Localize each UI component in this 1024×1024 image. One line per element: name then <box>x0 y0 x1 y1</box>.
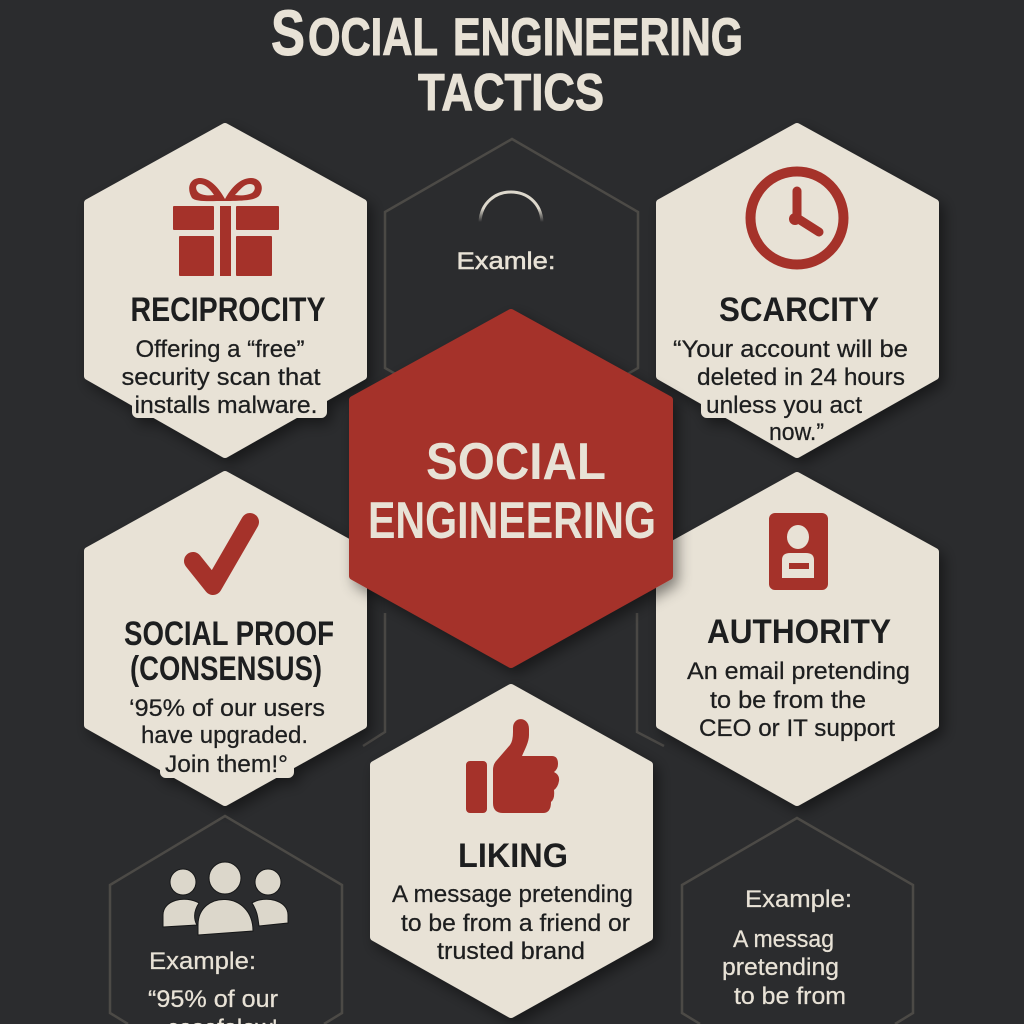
text: Example: <box>149 948 256 975</box>
text: truncated example: Examle: <box>456 248 556 275</box>
heading: AUTHORITY <box>707 613 891 651</box>
heading: SCARCITY <box>719 291 879 329</box>
text: unless you act <box>706 392 862 419</box>
text: to be from the <box>710 687 866 714</box>
text: A message pretending <box>392 881 633 908</box>
heading <box>124 615 334 688</box>
text <box>129 695 325 778</box>
heading: central label: ENGINEERING <box>368 492 656 550</box>
icon: clock <box>750 172 844 264</box>
icon: gift <box>173 178 279 276</box>
text: An email pretending <box>687 658 910 685</box>
icon: ID badge <box>769 513 828 590</box>
outline hexagon: bottom right example: pretending <box>722 954 839 981</box>
panel: reciprocity <box>88 127 363 454</box>
text: now.” <box>769 419 824 446</box>
icon: check mark <box>193 522 250 586</box>
panel: authority <box>660 476 935 802</box>
text: have upgraded. <box>141 722 308 749</box>
text: Join them!° <box>165 751 288 778</box>
title <box>271 0 743 122</box>
title: TACTICS <box>418 64 604 122</box>
panel: scarcity <box>660 127 935 454</box>
text: installs malware. <box>134 392 318 419</box>
outline hexagon: bottom right example: A messag <box>733 926 834 953</box>
text <box>122 336 321 419</box>
heading: SOCIAL PROOF <box>124 615 334 653</box>
text: deleted in 24 hours <box>697 364 905 391</box>
outline hexagon: bottom right example <box>682 818 913 1024</box>
text <box>687 658 910 742</box>
text: Example: <box>745 886 852 913</box>
text <box>392 881 633 965</box>
connector lines <box>363 613 664 746</box>
outline hexagon: bottom left example: “95% of our <box>148 986 278 1013</box>
panel: social proof <box>88 475 363 802</box>
text: security scan that <box>122 364 321 391</box>
heading: central label <box>368 433 656 550</box>
text: trusted brand <box>437 938 585 965</box>
title: OCIAL <box>308 8 438 67</box>
outline hexagon: bottom left example <box>110 816 342 1024</box>
text <box>673 336 908 446</box>
text: “Your account will be <box>673 336 908 363</box>
text: Offering a “free” <box>136 336 304 363</box>
icon: group of people <box>163 862 288 935</box>
text: ‘95% of our users <box>129 695 325 722</box>
icon: partial arc <box>480 192 542 222</box>
title: ENGINEERING <box>453 8 743 67</box>
panel: liking <box>374 688 649 1014</box>
icon: thumbs up <box>466 719 559 813</box>
heading: LIKING <box>458 837 568 875</box>
heading: RECIPROCITY <box>130 291 326 329</box>
outline hexagon: top example <box>385 139 638 440</box>
heading: (CONSENSUS) <box>130 650 322 688</box>
text: CEO or IT support <box>699 715 895 742</box>
outline hexagon: bottom right example: to be from <box>734 983 846 1010</box>
panel: central hexagon <box>353 313 669 664</box>
text: to be from a friend or <box>401 910 630 937</box>
heading: central label: SOCIAL <box>426 433 606 491</box>
